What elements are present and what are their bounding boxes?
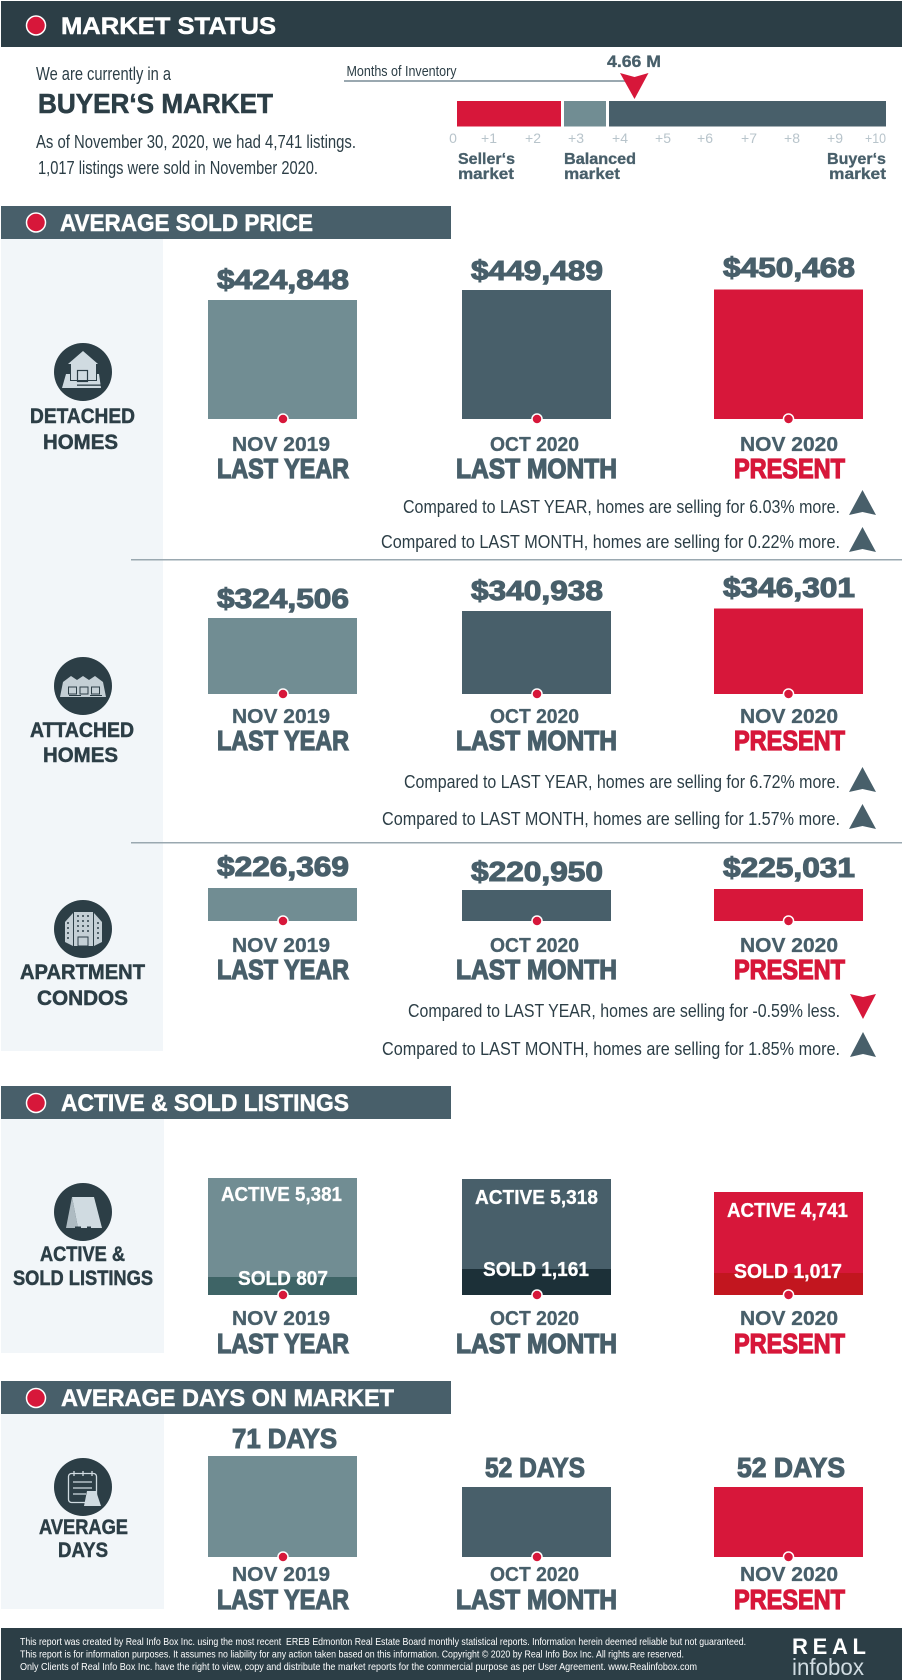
bar: attached present: NOV 2020 [740, 706, 838, 728]
icon: calendar with sign [54, 1458, 112, 1516]
bar: attached last year: $324,506 [217, 583, 349, 614]
comparison: detached vs last year: Compared to LAST YEAR, homes are selling for 6.03% more. [403, 497, 840, 517]
bar: listings last month: SOLD 1,161 [483, 1259, 589, 1281]
bar: listings last month [456, 1179, 617, 1359]
bar: listings last year: LAST YEAR [217, 1328, 349, 1359]
label: detached homes: HOMES [43, 431, 118, 454]
comparison: apartment vs last year: Compared to LAST YEAR, homes are selling for -0.59% less. [408, 1001, 840, 1021]
header: market status: MARKET STATUS [61, 13, 276, 40]
bar: days present [714, 1452, 863, 1615]
bar: apartment last year [208, 851, 357, 985]
footer: Only Clients of Real Info Box Inc. have the right to view, copy and distribute the market reports for the commercial purpose as per User Agreement. www.Realinfobox.com [20, 1661, 697, 1673]
bar: days last month: 52 DAYS [485, 1452, 585, 1483]
bar: days present: 52 DAYS [737, 1452, 845, 1483]
bar: listings last month: ACTIVE 5,318 [475, 1187, 598, 1209]
chart: months of inventory scale: market [829, 166, 887, 183]
bar: attached last month: OCT 2020 [490, 706, 579, 728]
bar: attached present: $346,301 [723, 572, 855, 603]
chart: months of inventory scale: market [564, 166, 621, 183]
bar: apartment last year: NOV 2019 [232, 935, 330, 957]
text block: current market summary: We are currently in a [36, 64, 172, 84]
panel: sold price sidebar [1, 239, 163, 1051]
label: active and sold listings: SOLD LISTINGS [13, 1267, 153, 1290]
label: apartment condos [20, 961, 145, 1010]
bar: apartment present: PRESENT [734, 954, 845, 985]
bar: detached present [714, 252, 863, 484]
header: active and sold listings: ACTIVE & SOLD LISTINGS [61, 1090, 349, 1117]
bar: listings last year: SOLD 807 [238, 1268, 328, 1290]
bar: listings present [714, 1192, 863, 1359]
label: average days: AVERAGE [39, 1516, 128, 1539]
header: average days on market [1, 1381, 451, 1414]
text block: current market summary: BUYER‘S MARKET [38, 88, 273, 119]
bar: detached last month: LAST MONTH [456, 453, 617, 484]
label: apartment condos: APARTMENT [20, 961, 145, 984]
bar: days last year: NOV 2019 [232, 1564, 330, 1586]
text block: current market summary [36, 64, 356, 178]
bar: apartment present: NOV 2020 [740, 935, 838, 957]
bar: apartment last month: LAST MONTH [456, 954, 617, 985]
bar: detached last month [456, 255, 617, 484]
bar: listings last month: LAST MONTH [456, 1328, 617, 1359]
bar: days last year: 71 DAYS [232, 1423, 337, 1454]
bar: days last month [456, 1452, 617, 1615]
chart: months of inventory scale: +4 [612, 130, 628, 146]
comparison: apartment vs last month: Compared to LAST MONTH, homes are selling for 1.85% more. [382, 1039, 840, 1059]
bar: attached last year: NOV 2019 [232, 706, 330, 728]
chart: months of inventory scale: Months of Inventory [346, 64, 457, 80]
bar: days present: PRESENT [734, 1584, 845, 1615]
bar: attached present: PRESENT [734, 725, 845, 756]
chart: months of inventory scale: +3 [568, 130, 584, 146]
bar: detached last month: $449,489 [471, 255, 603, 286]
bar: apartment last month [456, 856, 617, 985]
label: attached homes: ATTACHED [30, 719, 134, 742]
label: active and sold listings [13, 1243, 153, 1290]
bar: apartment present: $225,031 [723, 852, 855, 883]
bar: attached last month [456, 575, 617, 756]
bar: detached last month: OCT 2020 [490, 434, 579, 456]
bar: listings last month: OCT 2020 [490, 1308, 579, 1330]
chart: months of inventory scale: 4.66 M [607, 52, 661, 71]
icon: attached homes [54, 657, 112, 715]
label: attached homes: HOMES [43, 744, 118, 767]
bar: apartment present [714, 852, 863, 985]
icon: detached house [54, 343, 112, 401]
logo: real infobox [792, 1634, 866, 1680]
bar: listings present: PRESENT [734, 1328, 845, 1359]
bar: attached last month: LAST MONTH [456, 725, 617, 756]
chart: months of inventory scale: 0 [449, 130, 457, 146]
icon: apartment building [54, 900, 112, 958]
footer [1, 1628, 902, 1680]
logo: real infobox: infobox [792, 1654, 864, 1680]
bar: attached last year [208, 583, 357, 756]
chart: months of inventory scale: Balanced [564, 151, 636, 168]
bar: days last month: LAST MONTH [456, 1584, 617, 1615]
label: detached homes [30, 405, 135, 454]
bar: detached last year: $424,848 [217, 264, 349, 295]
chart: months of inventory scale: +9 [827, 130, 843, 146]
bar: listings present: SOLD 1,017 [734, 1261, 842, 1283]
comparison: detached vs last month: Compared to LAST MONTH, homes are selling for 0.22% more. [381, 532, 840, 552]
icon: listing sign [54, 1183, 112, 1241]
chart: months of inventory scale: +2 [525, 130, 541, 146]
label: average days: DAYS [58, 1539, 108, 1562]
chart: months of inventory scale: +5 [655, 130, 671, 146]
header: average sold price: AVERAGE SOLD PRICE [60, 210, 313, 237]
label: average days [39, 1516, 128, 1562]
bar: apartment last month: OCT 2020 [490, 935, 579, 957]
header: active and sold listings [1, 1086, 451, 1119]
bar: apartment last month: $220,950 [471, 856, 603, 887]
text block: current market summary: 1,017 listings were sold in November 2020. [38, 158, 318, 178]
bar: listings present: ACTIVE 4,741 [727, 1200, 848, 1222]
header: market status [1, 1, 902, 47]
logo: real infobox: REAL [792, 1634, 866, 1659]
panel: listings sidebar [1, 1119, 164, 1353]
header: average sold price [1, 206, 451, 239]
comparison: attached vs last month: Compared to LAST MONTH, homes are selling for 1.57% more. [382, 809, 840, 829]
label: attached homes [30, 719, 134, 767]
chart: months of inventory scale: +10 [865, 130, 886, 146]
panel: days sidebar [1, 1414, 164, 1609]
bar: listings last year: ACTIVE 5,381 [221, 1184, 342, 1206]
bar: detached last year: LAST YEAR [217, 453, 349, 484]
bar: days last month: OCT 2020 [490, 1564, 579, 1586]
bar: detached last year: NOV 2019 [232, 434, 330, 456]
chart: months of inventory scale [344, 52, 887, 183]
chart: months of inventory scale: Buyer‘s [827, 151, 886, 168]
bar: days present: NOV 2020 [740, 1564, 838, 1586]
comparison: attached vs last year: Compared to LAST YEAR, homes are selling for 6.72% more. [404, 772, 840, 792]
label: apartment condos: CONDOS [37, 987, 128, 1010]
footer: This report is for information purposes. It assumes no liability for any action taken based on this information. Copyright © 2020 by Real Info Box Inc. All rights are reserved. [20, 1648, 684, 1660]
bar: detached present: $450,468 [723, 252, 855, 283]
bar: attached present [714, 572, 863, 756]
bar: listings last year: NOV 2019 [232, 1308, 330, 1330]
bar: detached present: PRESENT [734, 453, 845, 484]
bar: detached present: NOV 2020 [740, 434, 838, 456]
chart: months of inventory scale: market [458, 166, 515, 183]
bar: days last year [208, 1423, 357, 1615]
bar: listings present: NOV 2020 [740, 1308, 838, 1330]
bar: attached last month: $340,938 [471, 575, 603, 606]
bar: apartment last year: $226,369 [217, 851, 349, 882]
bar: listings last year [208, 1178, 357, 1359]
bar: attached last year: LAST YEAR [217, 725, 349, 756]
bar: detached last year [208, 264, 357, 484]
bar: apartment last year: LAST YEAR [217, 954, 349, 985]
chart: months of inventory scale: +8 [784, 130, 800, 146]
chart: months of inventory scale: +7 [741, 130, 757, 146]
bar: days last year: LAST YEAR [217, 1584, 349, 1615]
chart: months of inventory scale: +6 [697, 130, 713, 146]
footer: This report was created by Real Info Box Inc. using the most recent EREB Edmonton Real Estate Board monthly statistical reports. Information herein deemed reliable but not guaranteed. [20, 1636, 746, 1648]
header: average days on market: AVERAGE DAYS ON MARKET [61, 1385, 394, 1412]
label: detached homes: DETACHED [30, 405, 135, 428]
chart: months of inventory scale: +1 [481, 130, 497, 146]
text block: current market summary: As of November 30, 2020, we had 4,741 listings. [36, 132, 356, 152]
chart: months of inventory scale: Seller‘s [458, 151, 515, 168]
label: active and sold listings: ACTIVE & [40, 1243, 125, 1266]
